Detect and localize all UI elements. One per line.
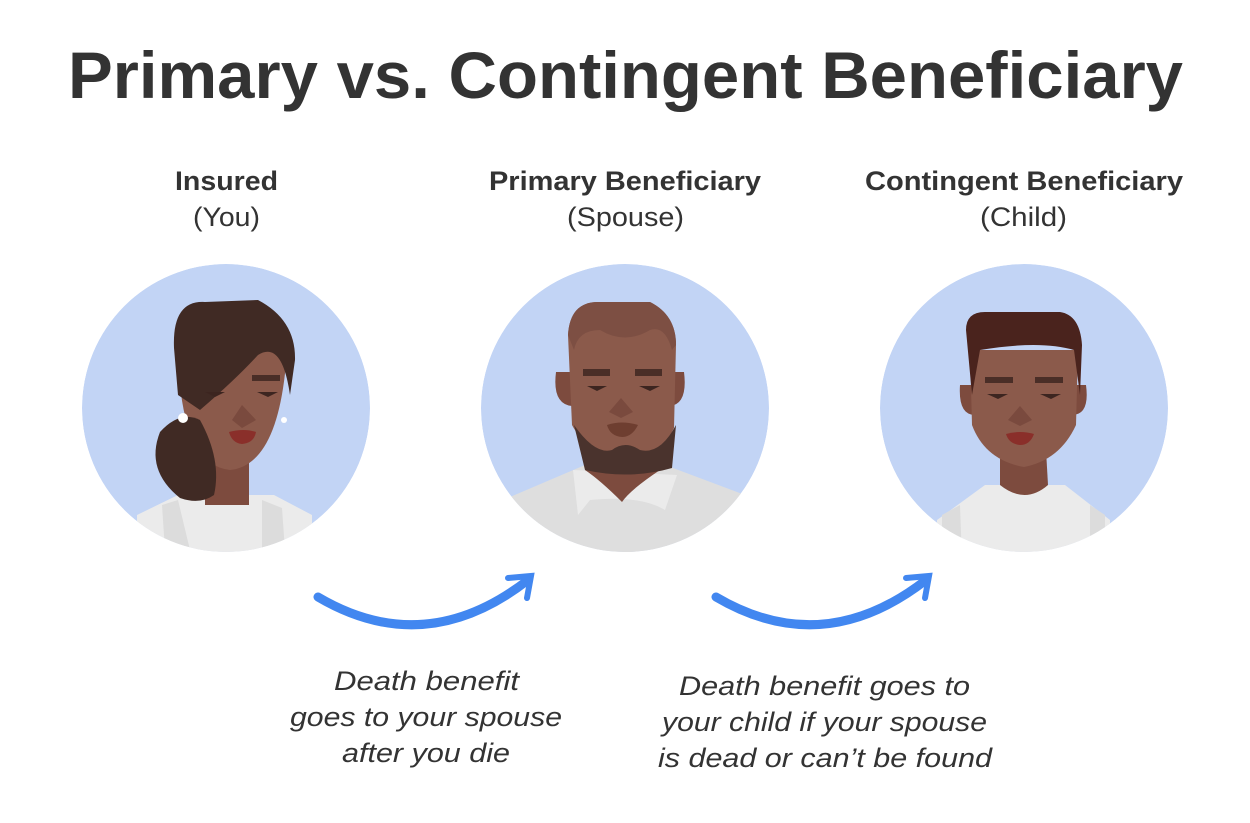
title: Primary vs. Contingent Beneficiary (68, 38, 1183, 112)
avatar: insured woman (82, 264, 370, 560)
caption 1: goes to your spouse (290, 702, 562, 732)
caption 2: is dead or can’t be found (658, 743, 993, 773)
heading: contingent beneficiary (865, 166, 1183, 232)
heading: contingent beneficiary: (Child) (980, 202, 1067, 232)
arrow 2 (716, 576, 929, 625)
caption 1: Death benefit (334, 666, 521, 696)
arrow 1 (318, 576, 531, 625)
heading: insured (175, 166, 278, 232)
heading: primary beneficiary: Primary Beneficiary (489, 166, 761, 196)
caption 2: your child if your spouse (660, 707, 987, 737)
heading: insured: Insured (175, 166, 278, 196)
heading: insured: (You) (193, 202, 260, 232)
caption 2: Death benefit goes to (679, 671, 970, 701)
heading: contingent beneficiary: Contingent Beneficiary (865, 166, 1183, 196)
caption 1 (290, 666, 562, 768)
avatar: child (880, 264, 1168, 560)
heading: primary beneficiary (489, 166, 761, 232)
caption 1: after you die (342, 738, 510, 768)
heading: primary beneficiary: (Spouse) (567, 202, 684, 232)
caption 2 (658, 671, 993, 773)
avatar: spouse man (481, 264, 769, 560)
